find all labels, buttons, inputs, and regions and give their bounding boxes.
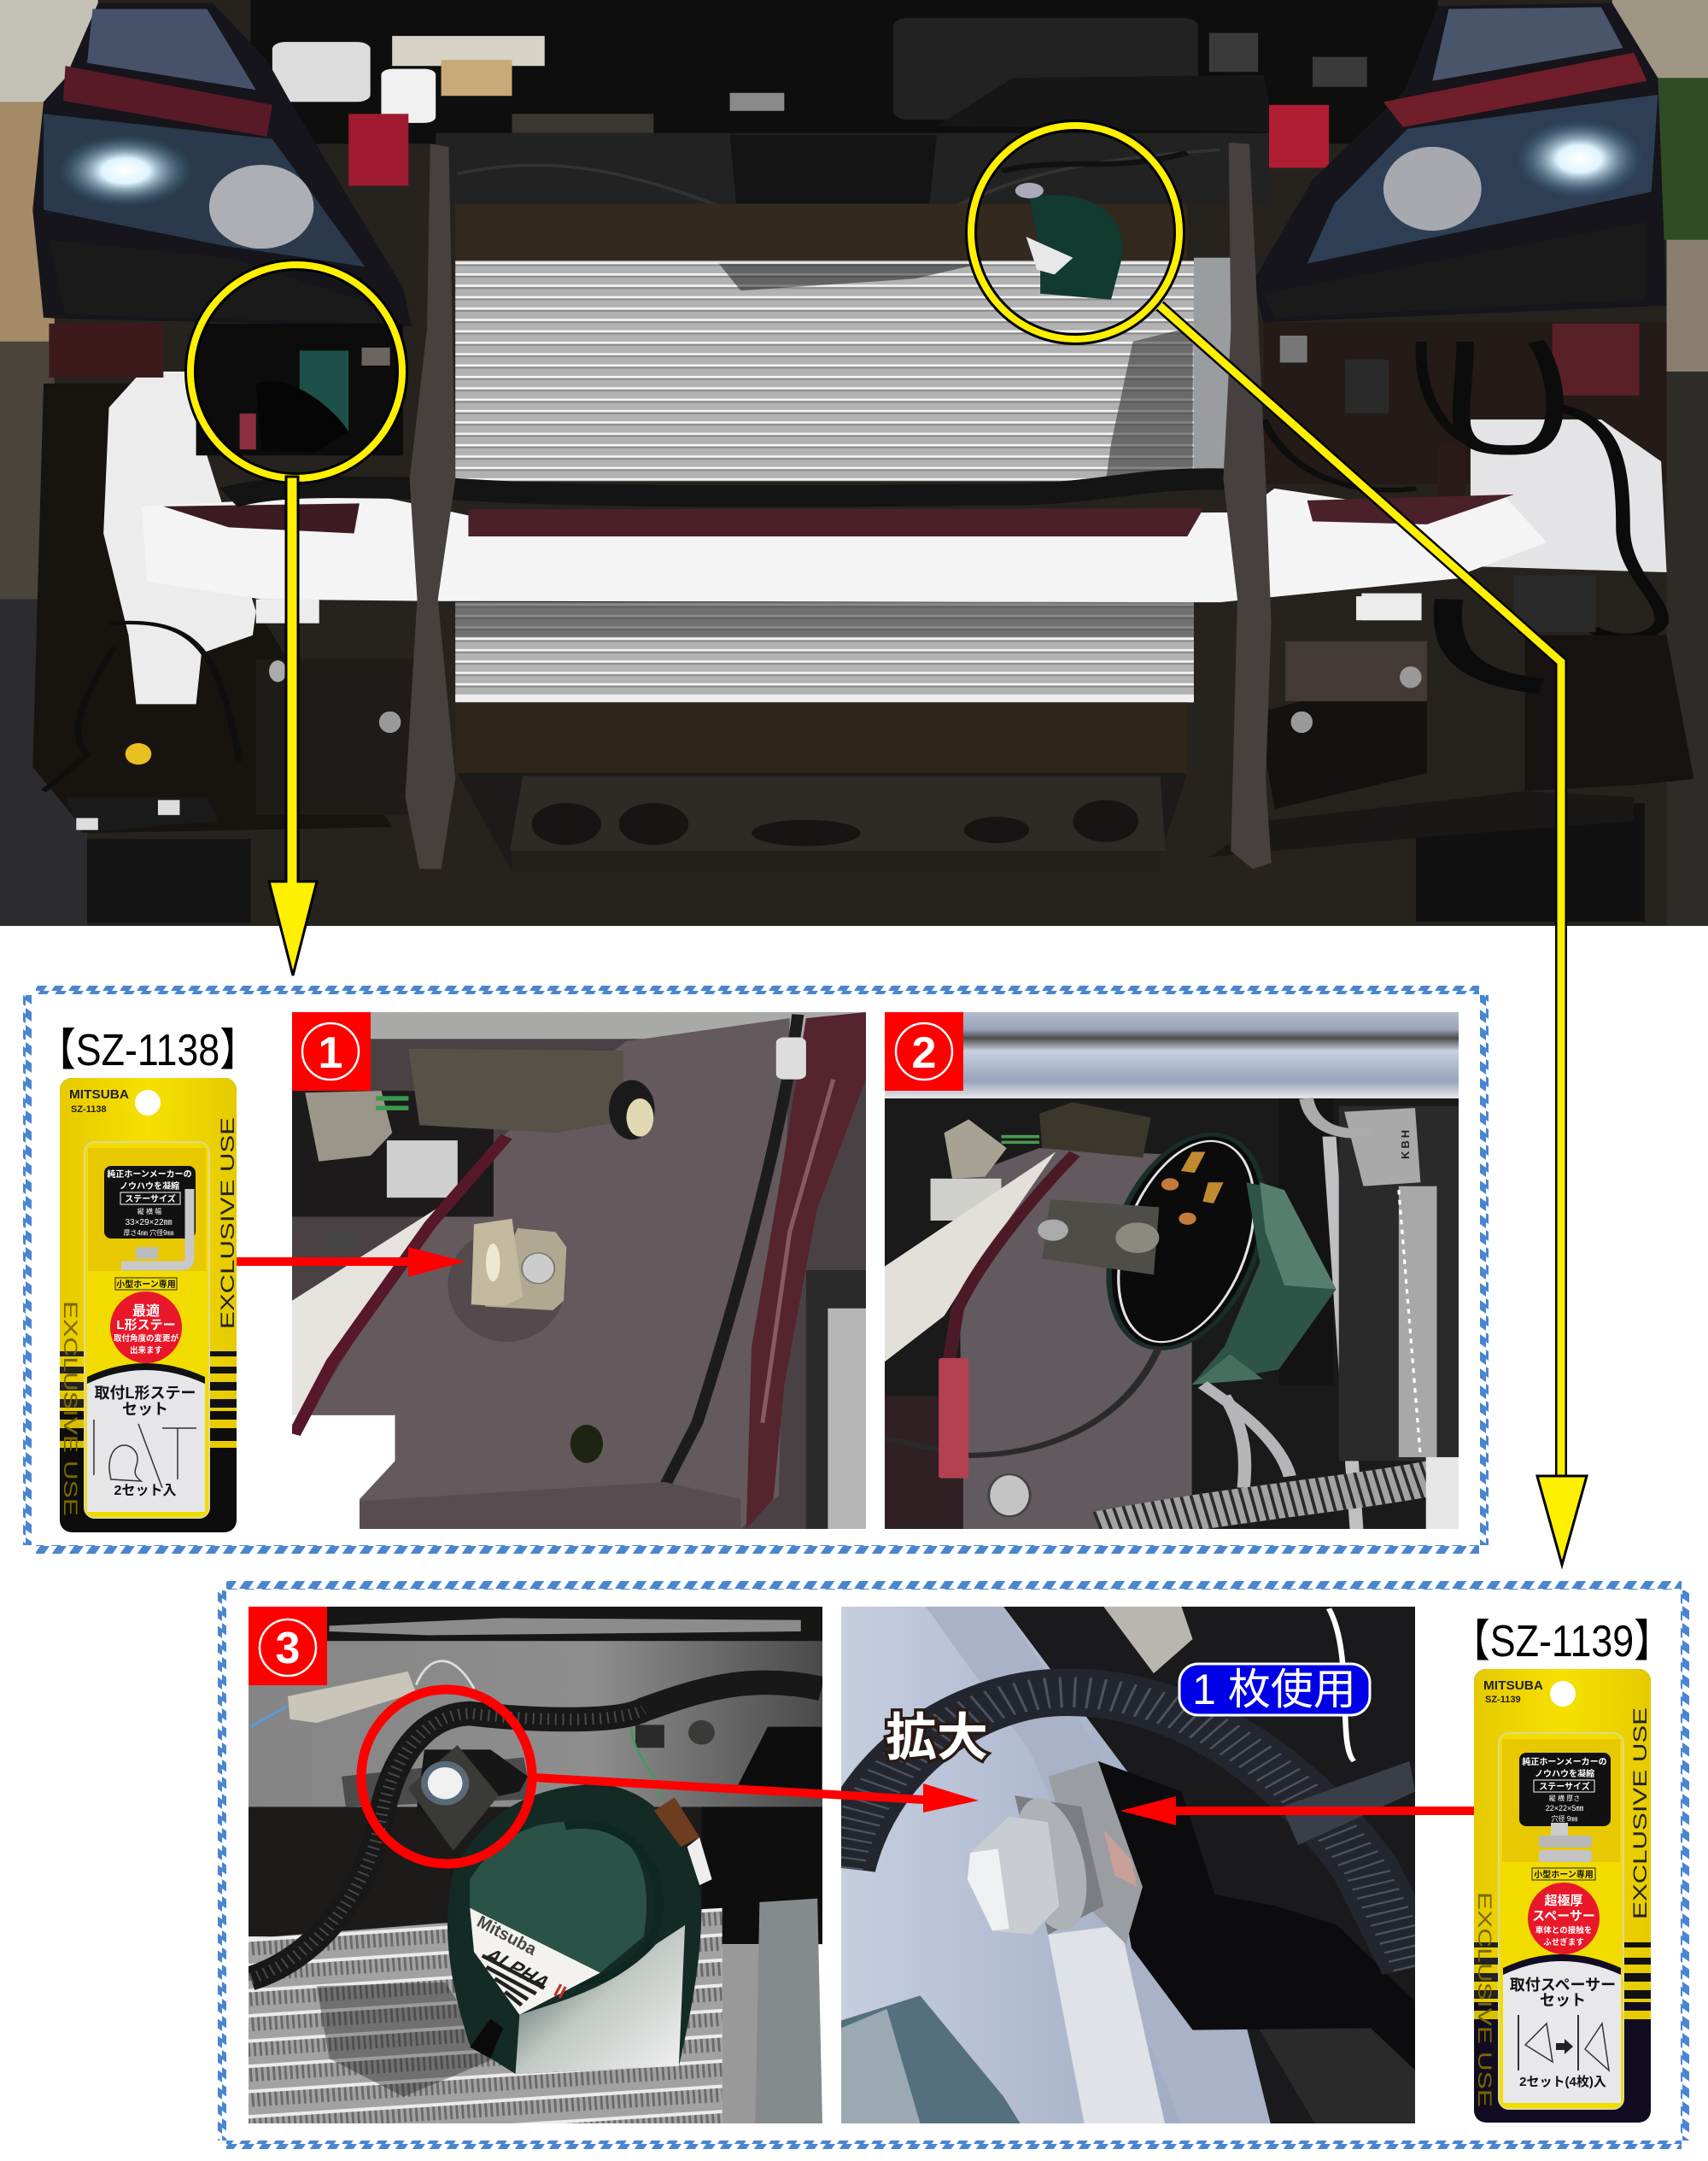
left headlight bbox=[32, 3, 412, 326]
label plate: 厚さ4㎜ 穴径9㎜ bbox=[123, 1228, 174, 1237]
label plate bbox=[1519, 1753, 1611, 1826]
product package SZ-1139: EXCLUSIVE USE bbox=[1629, 1707, 1651, 1919]
yellow arrow: left horn to panel 1 bbox=[269, 477, 317, 975]
red seal: 最適 bbox=[132, 1303, 160, 1319]
yellow arrow: right horn to panel 2 bbox=[1160, 306, 1587, 1565]
label plate: ステーサイズ bbox=[125, 1193, 176, 1204]
product package SZ-1139: EXCLUSIVE USE bbox=[1474, 1892, 1495, 2107]
radiator upper bbox=[455, 261, 1194, 481]
photo 1: L bracket on body bbox=[292, 1012, 866, 1529]
product package SZ-1138: EXCLUSIVE USE bbox=[60, 1301, 81, 1516]
label plate: ノウハウを凝縮 bbox=[120, 1180, 179, 1192]
product package SZ-1139 bbox=[1474, 1669, 1651, 2123]
product package SZ-1139: MITSUBA bbox=[1483, 1678, 1543, 1693]
badge 3: 3 bbox=[276, 1624, 300, 1673]
yellow circle: left horn position bbox=[190, 265, 402, 478]
product package SZ-1138: MITSUBA bbox=[69, 1087, 129, 1102]
product package SZ-1138: 2セット入 bbox=[114, 1484, 176, 1498]
product package SZ-1139: セット bbox=[1540, 1992, 1586, 2009]
product package SZ-1139: 取付スペーサー bbox=[1510, 1977, 1616, 1994]
right headlight bbox=[1253, 3, 1667, 322]
product package SZ-1138 bbox=[60, 1078, 238, 1532]
horn brand text: II bbox=[551, 1979, 570, 2003]
photo 3: horn close view bbox=[249, 1607, 822, 2123]
red arrow from circle to enlarged view bbox=[534, 1773, 979, 1813]
under tray bbox=[458, 773, 1187, 872]
badge 1 bbox=[292, 1012, 371, 1091]
label plate: ステーサイズ bbox=[1539, 1781, 1590, 1792]
product package SZ-1138: EXCLUSIVE USE bbox=[217, 1117, 238, 1329]
red seal bbox=[1528, 1883, 1600, 1954]
red seal: ふせぎます bbox=[1543, 1937, 1584, 1947]
crossmember and latch bbox=[436, 133, 1269, 258]
label plate: 縦 横 幅 bbox=[137, 1207, 161, 1215]
yellow circle: right horn position bbox=[971, 126, 1179, 339]
washer tank bbox=[103, 372, 256, 704]
main photo: car front with bumper removed bbox=[0, 0, 1708, 926]
horn left in photo bbox=[1002, 153, 1187, 300]
red seal bbox=[110, 1291, 182, 1363]
product package SZ-1139: SZ-1139 bbox=[1485, 1695, 1521, 1705]
red seal: 出来ます bbox=[130, 1345, 162, 1356]
callout: 1 sheet used: 1 枚使用 bbox=[1192, 1666, 1356, 1713]
product package SZ-1139: 2セット(4枚)入 bbox=[1519, 2074, 1606, 2089]
label plate: ノウハウを凝縮 bbox=[1535, 1768, 1594, 1779]
photo 2: horn mounted bbox=[885, 1012, 1459, 1529]
horn brand text: Mitsuba bbox=[474, 1912, 540, 1959]
right engine bay wiring bbox=[1264, 322, 1667, 637]
foam absorber and bumper beam bbox=[142, 489, 1547, 624]
red seal: スペーサー bbox=[1532, 1909, 1595, 1924]
caption: enlarged: 拡大 bbox=[886, 1709, 988, 1766]
horn body bbox=[447, 1784, 702, 2074]
red seal: 車体との接触を bbox=[1535, 1925, 1592, 1936]
badge 3 bbox=[249, 1607, 327, 1685]
badge 2 bbox=[885, 1012, 963, 1091]
product package SZ-1138: セット bbox=[122, 1401, 168, 1418]
product label SZ-1138: 【SZ-1138】 bbox=[38, 1026, 258, 1075]
label plate: 純正ホーンメーカーの bbox=[1522, 1756, 1607, 1767]
red seal: 取付角度の変更が bbox=[114, 1333, 178, 1344]
red seal: 超極厚 bbox=[1544, 1893, 1583, 1908]
corrugated harness bbox=[229, 479, 1231, 497]
label plate: 22×22×5㎜ bbox=[1546, 1804, 1583, 1813]
red circle marking the spacer bbox=[361, 1690, 532, 1864]
product package SZ-1138: 取付L形ステー bbox=[94, 1385, 196, 1402]
photo 4: enlarged spacer bolt bbox=[841, 1607, 1415, 2123]
label plate: 33×29×22㎜ bbox=[125, 1218, 173, 1227]
badge 1: 1 bbox=[319, 1028, 342, 1078]
stamp KBH on pipe fitting: KBH bbox=[1399, 1127, 1412, 1159]
harness bbox=[250, 1683, 822, 1978]
red seal: L形ステー bbox=[116, 1318, 176, 1332]
label plate bbox=[104, 1166, 196, 1239]
radiator lower bbox=[455, 602, 1194, 701]
red arrow from product to bracket bbox=[1120, 1796, 1474, 1825]
label plate: 純正ホーンメーカーの bbox=[107, 1168, 192, 1180]
foam strips bbox=[405, 143, 1272, 869]
product package SZ-1138: SZ-1138 bbox=[71, 1104, 107, 1115]
label plate: 縦 横 厚さ bbox=[1549, 1794, 1580, 1802]
badge 2: 2 bbox=[912, 1028, 936, 1078]
red arrow to bracket bbox=[237, 1247, 465, 1277]
product package SZ-1139: 小型ホーン専用 bbox=[1534, 1869, 1594, 1880]
horn brand text bbox=[474, 1912, 570, 2003]
panel 2 dashed frame bbox=[218, 1581, 1689, 2149]
product label SZ-1139: 【SZ-1139】 bbox=[1452, 1617, 1672, 1666]
horn brand text: ALPHA bbox=[478, 1946, 555, 1993]
product package SZ-1138: 小型ホーン専用 bbox=[116, 1279, 176, 1290]
label plate: 穴径 9㎜ bbox=[1552, 1814, 1577, 1823]
panel 1 dashed frame bbox=[23, 986, 1489, 1554]
